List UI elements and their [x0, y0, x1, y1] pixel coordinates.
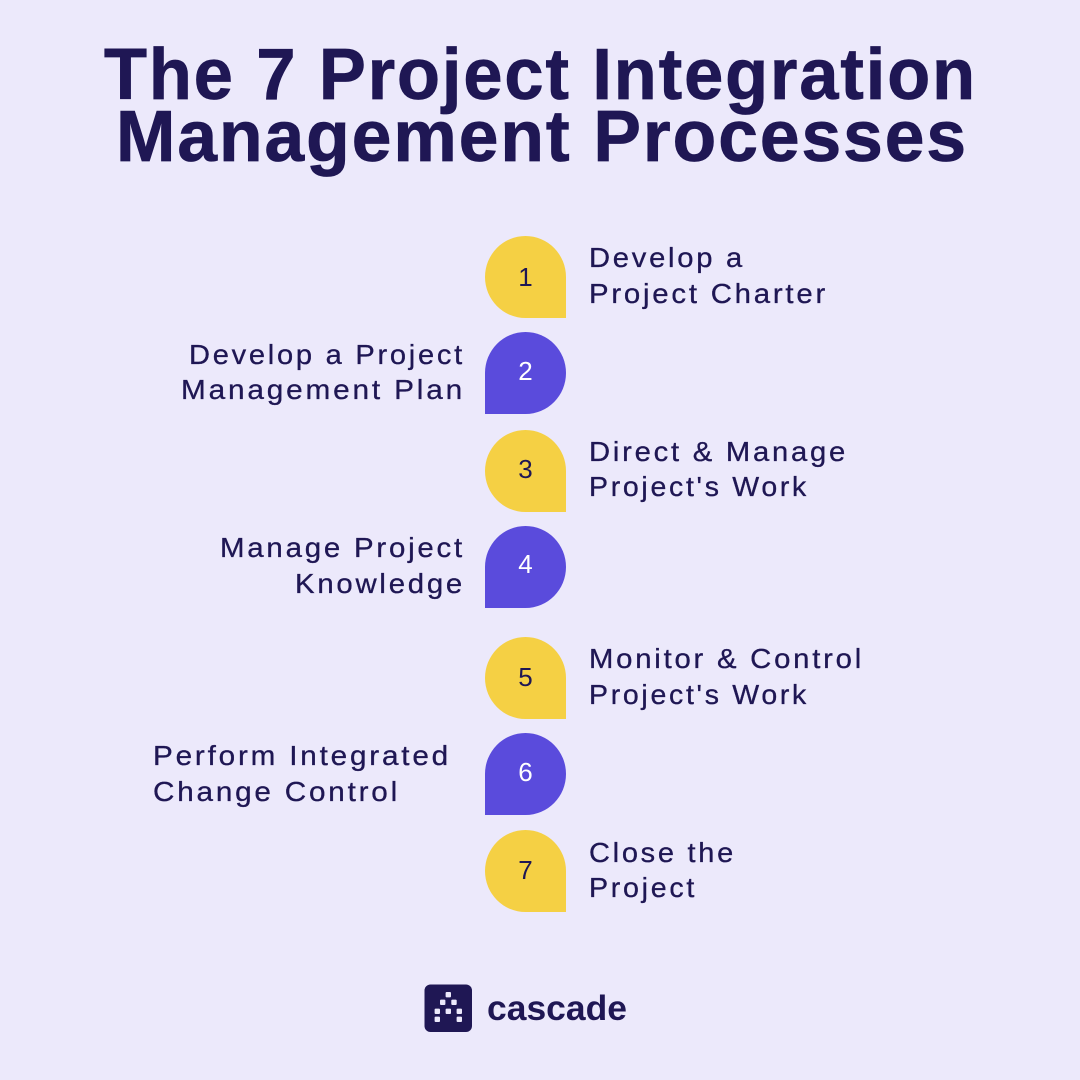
step 3: 3	[518, 454, 533, 484]
step 3: Direct & Manage	[589, 436, 848, 467]
step 6: Perform Integrated	[153, 740, 451, 771]
step 7: Close the	[589, 837, 736, 868]
step 7: 7	[518, 855, 533, 885]
logo: cascade	[424, 984, 627, 1032]
logo: cascade: cascade	[487, 989, 627, 1028]
step 6: Change Control	[153, 776, 400, 807]
step 2: Develop a Project	[189, 339, 465, 370]
step 1: Develop a	[589, 242, 745, 273]
step 7: Project	[589, 872, 697, 903]
title: Management Processes	[116, 97, 968, 177]
step 2	[181, 332, 566, 414]
step 3	[485, 430, 848, 512]
step 7	[485, 830, 736, 912]
step 1: Project Charter	[589, 278, 828, 309]
step 4: Manage Project	[220, 532, 465, 563]
step 6: 6	[518, 757, 533, 787]
step 4	[220, 526, 566, 608]
step 2: 2	[518, 356, 533, 386]
step 5: 5	[518, 662, 533, 692]
step 5	[485, 637, 864, 719]
step 4: Knowledge	[295, 568, 465, 599]
step 3: Project's Work	[589, 471, 809, 502]
step 1: 1	[518, 262, 533, 292]
step 4: 4	[518, 549, 533, 579]
step 2: Management Plan	[181, 374, 465, 405]
step 5: Project's Work	[589, 679, 809, 710]
title	[104, 35, 977, 177]
step 1	[485, 236, 828, 318]
step 6	[153, 733, 566, 815]
step 5: Monitor & Control	[589, 643, 864, 674]
title: The 7 Project Integration	[104, 35, 977, 115]
